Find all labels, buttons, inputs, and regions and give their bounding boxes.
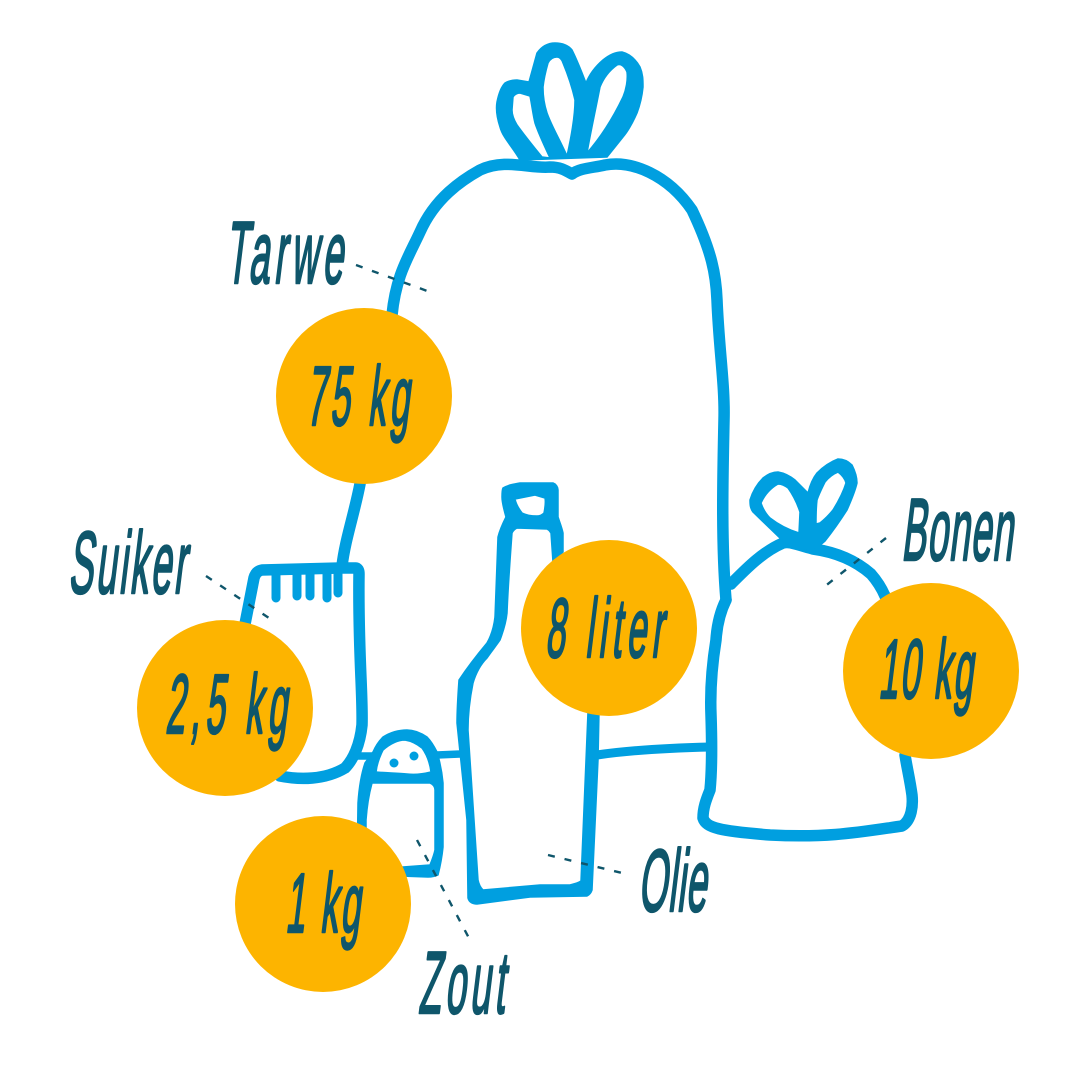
badge: 2,5 kg: 2,5 kg (163, 657, 296, 751)
badge: 10 kg: 10 kg (876, 622, 982, 716)
badge: 10 kg (843, 583, 1019, 759)
icon: beans bag (597, 459, 912, 836)
badge: 8 liter: 8 liter (543, 581, 672, 675)
badge: 2,5 kg (137, 620, 313, 796)
badge: 8 liter (521, 540, 697, 716)
connector lines to neighbours (357, 754, 460, 756)
icon: sugar bag (245, 568, 362, 778)
badge: 1 kg (235, 816, 411, 992)
label: Zout: Zout (416, 935, 514, 1032)
dashed leader: Olie (548, 855, 622, 873)
dashed leader: Bonen (824, 538, 886, 587)
badge: 75 kg: 75 kg (304, 349, 418, 443)
badge: 75 kg (276, 308, 452, 484)
icon: wheat sack (342, 43, 726, 600)
badge: 1 kg: 1 kg (283, 856, 369, 950)
dashed leader: Tarwe (356, 265, 430, 292)
bag knot ears (750, 459, 857, 552)
dashed leader: Zout (417, 840, 470, 940)
label: Olie: Olie (636, 833, 716, 930)
label: Bonen: Bonen (899, 482, 1022, 579)
dashed leader: Suiker (206, 576, 272, 620)
label: Suiker: Suiker (66, 515, 195, 612)
icon: salt shaker (357, 730, 460, 877)
icon: oil bottle (457, 483, 599, 904)
label: Tarwe: Tarwe (223, 205, 352, 302)
sack knot ears (496, 43, 643, 160)
